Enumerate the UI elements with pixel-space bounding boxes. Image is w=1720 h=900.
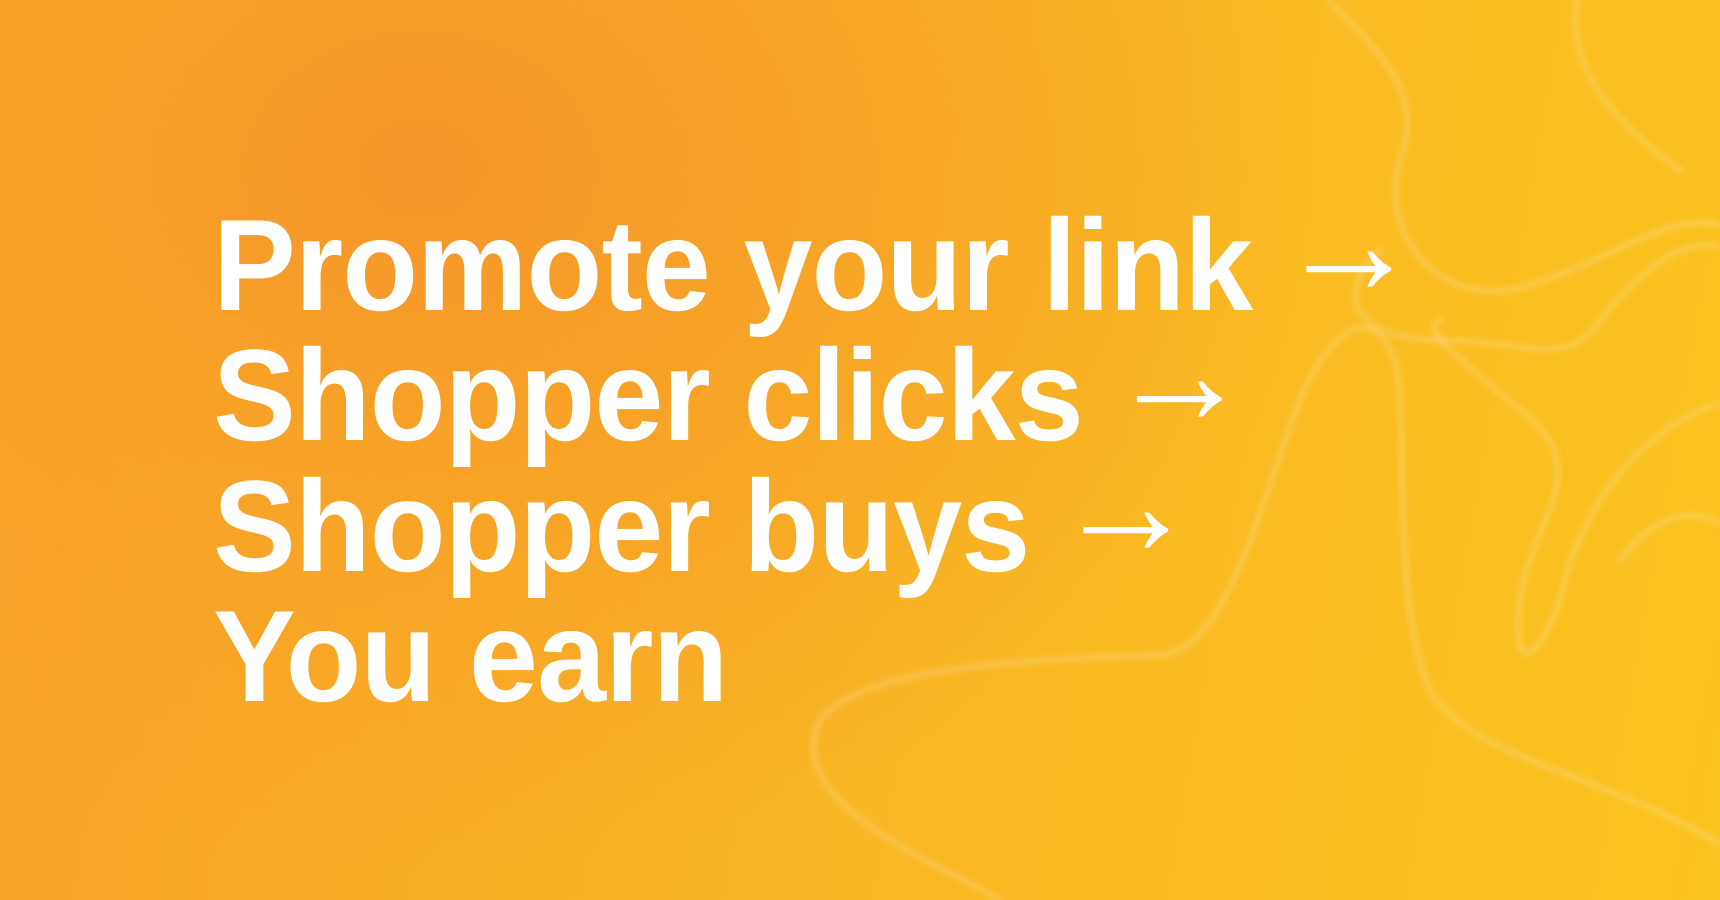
line 4: You earn xyxy=(213,583,727,729)
line 1: Promote your link→ xyxy=(213,158,1419,338)
line 3: Shopper buys→ xyxy=(213,419,1196,599)
line 2: Shopper clicks→ xyxy=(213,288,1250,468)
title text block xyxy=(213,158,1419,729)
